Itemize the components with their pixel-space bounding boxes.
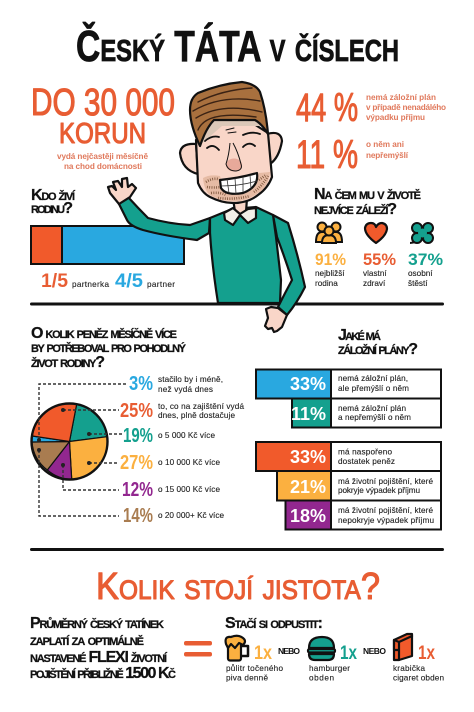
44 percent note: výpadku příjmu — [366, 113, 425, 122]
label father: partner — [147, 280, 175, 289]
values: 14% — [123, 505, 153, 527]
11 percent note: o něm ani — [366, 140, 404, 149]
smile — [220, 173, 257, 194]
equals sign — [184, 641, 212, 656]
label cigarettes: krabička — [393, 664, 425, 673]
raised arm — [119, 197, 210, 240]
bar descriptions: nemá záložní plán — [338, 404, 406, 413]
eyebrows and eyes — [205, 128, 260, 150]
multiplier beer: 1x — [254, 643, 272, 664]
panel: what to give up — [225, 615, 444, 682]
heading: by potřeboval pro pohodlný — [31, 339, 187, 356]
heading: život rodiny? — [31, 354, 105, 371]
pie chart — [32, 403, 108, 480]
panel: cost of insurance: pojištění přibližně 1500 Kč — [30, 665, 176, 682]
bar descriptions: nepokryje výpadek příjmu — [338, 516, 434, 525]
heading: O kolik peněz měsíčně více — [31, 325, 177, 342]
descriptions: než vydá dnes — [158, 385, 213, 394]
neck — [233, 198, 247, 216]
collar — [224, 208, 256, 225]
descriptions: dnes, plně dostačuje — [158, 411, 235, 420]
leader lines — [37, 384, 128, 516]
descriptions: o 10 000 Kč více — [158, 458, 220, 467]
share partner: 1/5 — [41, 271, 68, 292]
bar descriptions: ale přemýšlí o něm — [338, 384, 409, 393]
bar descriptions: má životní pojištění, které — [338, 506, 433, 515]
description: vydá nejčastěji měsíčně — [57, 152, 148, 161]
divider line upper — [30, 302, 444, 306]
value health: 55% — [363, 250, 396, 269]
icon: burger — [308, 637, 335, 660]
beard — [203, 172, 270, 201]
description: na chod domácnosti — [64, 162, 142, 171]
values: 19% — [123, 425, 153, 447]
heading: záložní plány? — [338, 341, 418, 358]
descriptions — [158, 375, 244, 520]
multiplier burger: 1x — [340, 643, 357, 664]
bar values: 18% — [290, 506, 326, 526]
11 percent: 11 % — [296, 133, 358, 177]
panel: backup plan stats — [296, 86, 446, 177]
icon: beer — [226, 636, 248, 660]
illustration: smiling father — [108, 82, 305, 332]
label happiness: osobní — [408, 269, 433, 278]
label burger: obden — [309, 674, 334, 682]
face — [196, 115, 272, 203]
bar descriptions: a nepřemýšlí o něm — [338, 413, 411, 422]
other arm — [273, 215, 305, 315]
label family: rodina — [315, 279, 338, 288]
section title: Kolik stojí jistota? — [96, 566, 380, 608]
label cigarettes: cigaret obden — [393, 674, 444, 682]
icon: family — [316, 222, 342, 243]
panel: who supports the family — [31, 187, 184, 292]
values: 12% — [122, 479, 153, 501]
big unit: KORUN — [59, 118, 146, 150]
44 percent: 44 % — [296, 86, 358, 130]
heading: nejvíce záleží? — [314, 201, 397, 218]
descriptions: o 5 000 Kč více — [158, 431, 215, 440]
or 1: NEBO — [278, 646, 300, 656]
ears — [180, 133, 282, 174]
values — [120, 373, 153, 527]
hair strands — [193, 88, 262, 130]
multiplier cigarettes: 1x — [418, 643, 435, 664]
panel: what matters most — [314, 186, 443, 288]
bar values: 21% — [290, 477, 326, 497]
bar descriptions: nemá záložní plán, — [338, 374, 408, 383]
values: 27% — [120, 452, 153, 474]
hair — [190, 82, 268, 146]
sweater body — [210, 207, 281, 303]
label happiness: štěstí — [408, 279, 428, 288]
label beer: půlitr točeného — [226, 663, 283, 673]
panel: cost of insurance: Průměrný český tatínek — [30, 615, 164, 632]
icon: cigarette box — [394, 634, 412, 660]
descriptions: stačilo by i méně, — [158, 375, 223, 384]
values: 25% — [120, 400, 153, 422]
bar values: 11% — [291, 404, 326, 424]
descriptions: o 20 000+ Kč více — [158, 511, 224, 520]
label beer: piva denně — [226, 674, 268, 682]
panel: cost of insurance: nastavené FLEXI životní — [30, 649, 168, 666]
bar values — [290, 374, 326, 526]
heading: Stačí si odpustit: — [225, 615, 323, 632]
bar descriptions: má životní pojištění, které — [338, 477, 433, 486]
icon: heart — [365, 223, 387, 243]
44 percent note: nemá záložní plán — [366, 93, 436, 102]
panel: cost of insurance: zaplatí za optimálně — [30, 632, 144, 649]
bars without plan — [256, 370, 441, 428]
bar descriptions: pokryje výpadek příjmu — [338, 486, 420, 495]
label family: nejbližší — [315, 269, 345, 278]
bar descriptions: dostatek peněz — [338, 457, 395, 466]
heading: Kdo živí — [31, 187, 76, 204]
big number: DO 30 000 — [31, 82, 175, 124]
icon: clover — [410, 223, 433, 243]
label burger: hamburger — [309, 664, 350, 673]
values: 3% — [129, 373, 153, 395]
panel: monthly household spend — [31, 82, 175, 171]
value happiness: 37% — [408, 250, 443, 269]
label health: zdraví — [363, 279, 386, 288]
nose — [226, 143, 242, 172]
heading: rodinu? — [31, 200, 73, 217]
bar descriptions: má naspořeno — [338, 448, 392, 456]
bar values: 33% — [290, 374, 326, 394]
forehead shadow — [200, 120, 268, 145]
11 percent note: nepřemýšlí — [366, 151, 409, 160]
share father: 4/5 — [115, 271, 143, 292]
bars with plan — [256, 442, 441, 530]
label partner: partnerka — [72, 280, 109, 289]
44 percent note: v případě nenadálého — [366, 103, 446, 112]
split bar — [31, 226, 184, 264]
or 2: NEBO — [363, 646, 386, 656]
label health: vlastní — [363, 269, 387, 278]
bar values: 33% — [290, 447, 326, 467]
bar descriptions — [338, 374, 434, 525]
divider line lower — [30, 548, 444, 551]
descriptions: to, co na zajištění vydá — [158, 402, 244, 411]
heading: Jaké má — [338, 327, 381, 344]
heading: Na čem mu v životě — [314, 186, 421, 203]
lower hand — [265, 307, 287, 332]
raised hand — [108, 178, 136, 204]
panel: how much more money — [31, 325, 244, 527]
descriptions: o 15 000 Kč více — [158, 485, 220, 494]
panel: backup plans — [256, 327, 441, 530]
value family: 91% — [315, 250, 346, 269]
